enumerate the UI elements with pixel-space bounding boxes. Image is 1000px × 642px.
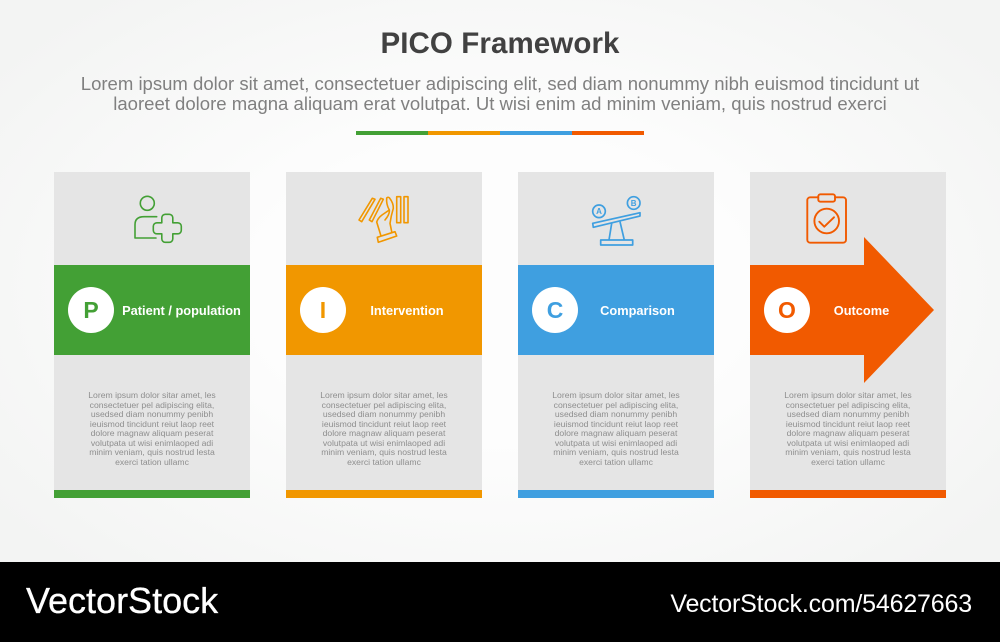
bottom strip [750, 490, 946, 498]
band label: Outcome [834, 303, 889, 318]
body text: minim veniam, quis nostrud lesta [785, 447, 911, 457]
body text: usedsed diam nonummy penibh [787, 409, 909, 419]
letter badge O: O [778, 297, 796, 323]
body text: exerci tation ullamc [347, 457, 421, 467]
icon: clipboard with check [806, 193, 847, 244]
body text: volutpata ut wisi enimlaoped adi [555, 438, 677, 448]
icon: seesaw scale A B: A [596, 207, 602, 216]
body text: exerci tation ullamc [811, 457, 885, 467]
body text: Lorem ipsum dolor sitar amet, les [784, 390, 912, 400]
body text: minim veniam, quis nostrud lesta [321, 447, 447, 457]
body text: consectetuer pel adipiscing elita, [322, 400, 446, 410]
letter badge O [764, 287, 810, 333]
body text: exerci tation ullamc [115, 457, 189, 467]
body text: ieuismod tincidunt reiut laop reet [786, 419, 910, 429]
subtitle text: Lorem ipsum dolor sit amet, consectetuer adipiscing elit, sed diam nonummy nibh euismod tincidunt ut [81, 72, 919, 94]
body text: volutpata ut wisi enimlaoped adi [91, 438, 213, 448]
body text: consectetuer pel adipiscing elita, [554, 400, 678, 410]
body text: volutpata ut wisi enimlaoped adi [323, 438, 445, 448]
body text: usedsed diam nonummy penibh [323, 409, 445, 419]
letter badge I [300, 287, 346, 333]
title: PICO Framework [380, 27, 620, 60]
body text: dolore magnaw aliquam peserat [787, 428, 909, 438]
body text [88, 390, 216, 467]
body text: Lorem ipsum dolor sitar amet, les [552, 390, 680, 400]
icon: hand with bars [358, 196, 409, 244]
body text: consectetuer pel adipiscing elita, [90, 400, 214, 410]
letter badge P: P [83, 297, 99, 323]
bottom strip [54, 490, 250, 498]
footer bar [0, 562, 1000, 642]
footer logo: VectorStock [26, 580, 218, 621]
body text: dolore magnaw aliquam peserat [323, 428, 445, 438]
body text [784, 390, 912, 467]
body text [320, 390, 448, 467]
panel: Comparison [518, 172, 714, 498]
body text [552, 390, 680, 467]
icon: person with plus [134, 196, 182, 244]
panel: Intervention [286, 172, 482, 498]
body text: usedsed diam nonummy penibh [555, 409, 677, 419]
colour band [286, 265, 482, 355]
body text: minim veniam, quis nostrud lesta [553, 447, 679, 457]
subtitle text: laoreet dolore magna aliquam erat volutpat. Ut wisi enim ad minim veniam, quis nostrud exerci [113, 92, 887, 114]
band label: Comparison [600, 303, 675, 318]
body text: usedsed diam nonummy penibh [91, 409, 213, 419]
body text: ieuismod tincidunt reiut laop reet [322, 419, 446, 429]
body text: volutpata ut wisi enimlaoped adi [787, 438, 909, 448]
letter badge C [532, 287, 578, 333]
subtitle text [81, 72, 919, 114]
icon: seesaw scale A B: B [631, 199, 637, 208]
body text: dolore magnaw aliquam peserat [91, 428, 213, 438]
body text: minim veniam, quis nostrud lesta [89, 447, 215, 457]
body text: exerci tation ullamc [579, 457, 653, 467]
panel: Patient / population [54, 172, 250, 498]
body text: ieuismod tincidunt reiut laop reet [554, 419, 678, 429]
body text: consectetuer pel adipiscing elita, [786, 400, 910, 410]
colour band [518, 265, 714, 355]
bottom strip [518, 490, 714, 498]
body text: ieuismod tincidunt reiut laop reet [90, 419, 214, 429]
icon: seesaw scale A B [592, 196, 641, 246]
bottom strip [286, 490, 482, 498]
letter badge I: I [320, 297, 326, 323]
body text: dolore magnaw aliquam peserat [555, 428, 677, 438]
band label: Intervention [370, 303, 444, 318]
letter badge C: C [547, 297, 563, 323]
body text: Lorem ipsum dolor sitar amet, les [320, 390, 448, 400]
band label: Patient / population [122, 303, 241, 318]
letter badge P [68, 287, 114, 333]
four-colour divider [356, 131, 644, 135]
body text: Lorem ipsum dolor sitar amet, les [88, 390, 216, 400]
footer url: VectorStock.com/54627663 [670, 590, 972, 618]
panel: Outcome [750, 172, 946, 498]
colour band [54, 265, 250, 355]
arrow band [750, 237, 934, 383]
